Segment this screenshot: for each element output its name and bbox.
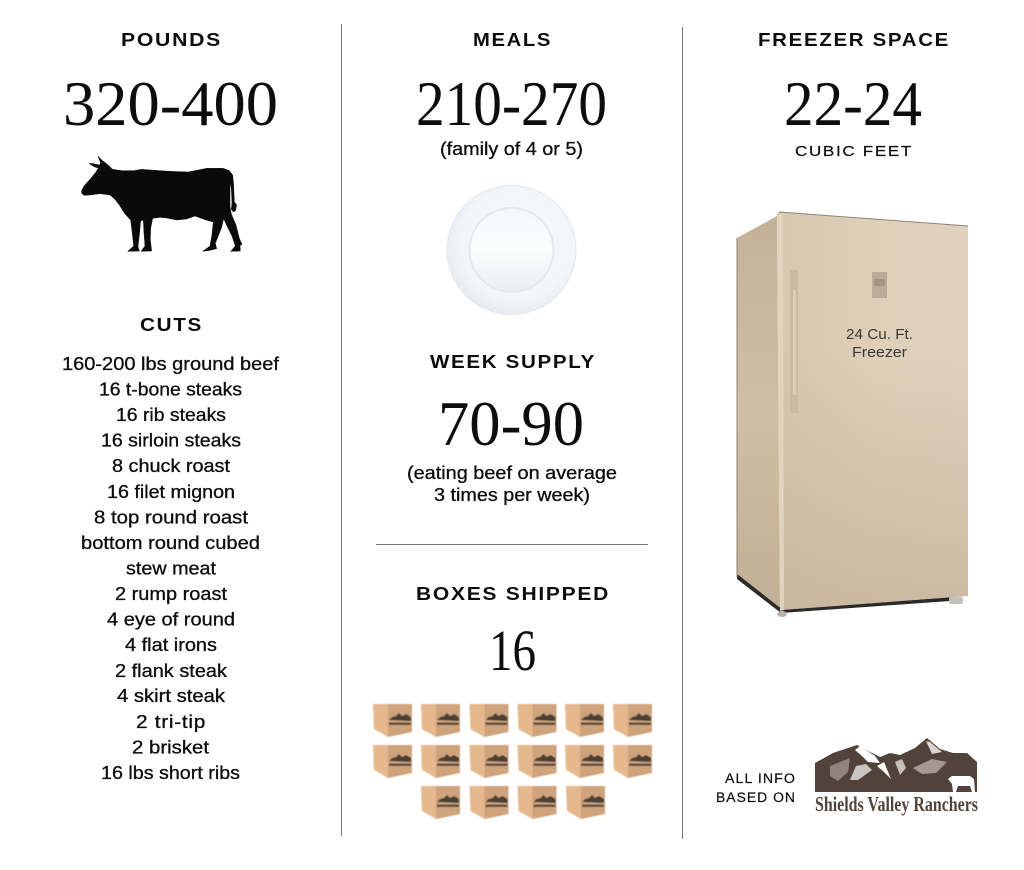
number: pounds: 320-400 [63, 69, 278, 139]
icon: cow silhouette [82, 156, 242, 251]
list: cuts [62, 354, 280, 783]
list: cuts: 16 filet mignon [107, 482, 235, 502]
icon: sixteen shipping boxes [373, 704, 652, 819]
list: cuts: 16 sirloin steaks [101, 430, 241, 450]
heading: pounds: POUNDS [121, 29, 222, 50]
list: cuts: 2 rump roast [115, 584, 227, 604]
list: cuts: 8 chuck roast [112, 456, 230, 476]
label: freezer size: 24 Cu. Ft. [846, 326, 913, 343]
list: cuts: stew meat [126, 558, 216, 578]
source note: BASED ON [716, 790, 796, 805]
source note: ALL INFO [725, 771, 796, 786]
panel: meals, week supply and boxes [373, 29, 652, 819]
caption: family size: (family of 4 or 5) [440, 139, 583, 159]
number: cubic feet: 22-24 [784, 69, 922, 139]
column divider left [340, 24, 342, 836]
column divider right [682, 27, 684, 839]
list: cuts: 2 brisket [132, 738, 209, 758]
list: cuts: 2 flank steak [115, 661, 228, 681]
list: cuts: 16 lbs short ribs [101, 763, 240, 783]
list: cuts: 4 flat irons [125, 635, 217, 655]
icon: upright freezer [737, 212, 968, 617]
caption: eating frequency [407, 463, 617, 505]
caption: cubic feet: CUBIC FEET [795, 143, 913, 160]
list: cuts: bottom round cubed [81, 533, 260, 553]
caption: eating frequency: 3 times per week) [434, 485, 590, 505]
icon: plate [447, 186, 576, 314]
list: cuts: 8 top round roast [94, 508, 248, 528]
panel: pounds and cuts [62, 29, 280, 783]
panel: freezer space [716, 29, 978, 816]
label: freezer size: Freezer [852, 344, 907, 361]
list: cuts: 4 skirt steak [117, 686, 226, 706]
heading: week supply: WEEK SUPPLY [430, 351, 596, 372]
list: cuts: 4 eye of round [107, 610, 235, 630]
logo: Shields Valley Ranchers [815, 738, 978, 816]
source note [716, 771, 796, 805]
heading: meals: MEALS [473, 29, 552, 50]
list: cuts: 160-200 lbs ground beef [62, 354, 280, 374]
logo: Shields Valley Ranchers: Shields Valley Ranchers [815, 792, 978, 816]
number: week supply: 70-90 [438, 389, 584, 459]
caption: eating frequency: (eating beef on average [407, 463, 617, 483]
number: boxes: 16 [489, 618, 536, 683]
heading: cuts: CUTS [140, 314, 203, 335]
number: meals: 210-270 [416, 69, 607, 139]
heading: freezer space: FREEZER SPACE [758, 29, 950, 50]
list: cuts: 16 t-bone steaks [99, 380, 242, 400]
list: cuts: 16 rib steaks [116, 405, 226, 425]
logo cow [948, 776, 975, 792]
list: cuts: 2 tri-tip [136, 712, 206, 732]
heading: boxes shipped: BOXES SHIPPED [416, 583, 610, 604]
label: freezer size [846, 326, 913, 361]
